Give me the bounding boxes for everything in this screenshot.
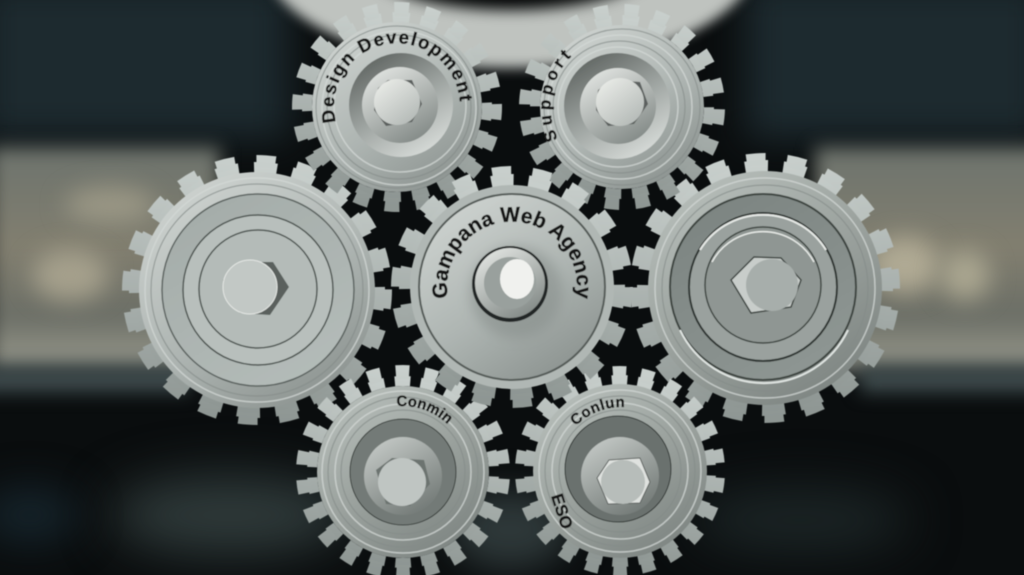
gear: bottom right, Conlun and ESO bbox=[514, 365, 726, 575]
label: ESO: ESO bbox=[547, 491, 576, 531]
gear: centre, Gampana Web Agency bbox=[390, 165, 634, 409]
gear: top right, Support bbox=[518, 4, 726, 211]
label: Support: Support bbox=[540, 50, 572, 142]
gear: top left, Design Development bbox=[291, 2, 503, 213]
gear: left large bbox=[119, 152, 395, 428]
label: Gampana Web Agency: Gampana Web Agency bbox=[432, 206, 589, 300]
gear: bottom left, Conmin bbox=[296, 364, 510, 575]
label: Conlun: Conlun bbox=[570, 398, 624, 424]
top light ring bbox=[265, 0, 755, 68]
label: Conmin: Conmin bbox=[396, 394, 452, 424]
gear: right large bbox=[627, 150, 903, 426]
label: Design Development: Design Development bbox=[321, 31, 472, 124]
